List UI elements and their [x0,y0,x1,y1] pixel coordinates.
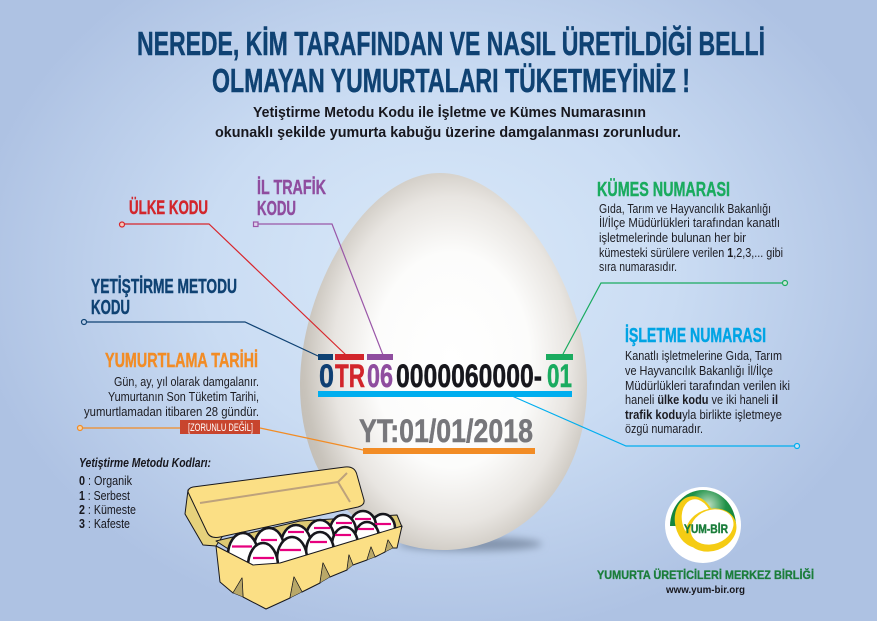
heading: yetiştirme metodu kodu: YETİŞTİRME METODU [91,275,237,298]
panel: kümes numarası: İl/İlçe Müdürlükleri tarafından kanatlı [599,215,780,230]
panel: işletme numarası: Kanatlı işletmelerine Gıda, Tarım [625,348,782,363]
panel: kümes numarası: kümesteki sürülere verilen 1,2,3,... gibi [599,245,783,260]
logo: yum-bir: YUM-BİR [684,521,728,536]
heading: ülke kodu: ÜLKE KODU [129,198,208,219]
title: OLMAYAN YUMURTALARI TÜKETMEYİNİZ ! [212,62,690,99]
egg date stamp: YT:01/01/2018 [359,413,533,449]
logo caption: YUMURTA ÜRETİCİLERİ MERKEZ BİRLİĞİ [597,567,814,582]
logo: yum-bir [665,487,743,563]
panel: kümes numarası: sıra numarasıdır. [599,259,677,274]
leader: ülke kodu [120,222,346,355]
egg [300,173,587,550]
subtitle [215,104,681,141]
leader: kümes numarası [563,280,788,354]
legend: yetiştirme metodu kodları: 1 : Serbest [79,488,130,503]
panel: yumurtlama tarihi: Yumurtanın Son Tüketim Tarihi, [108,389,259,404]
heading: yetiştirme metodu kodu: KODU [91,297,130,319]
egg stamp code: 0 [319,358,334,394]
panel: yumurtlama tarihi: yumurtlamadan itibaren 28 gündür. [84,404,259,419]
date underline [363,448,535,454]
egg stamp code: TR [335,358,365,394]
panel: kümes numarası: Gıda, Tarım ve Hayvancılık Bakanlığı [599,201,771,216]
legend: yetiştirme metodu kodları: 2 : Kümeste [79,502,136,517]
panel: işletme numarası: trafik koduyla birlikte işletmeye [625,407,782,422]
egg shadow [398,537,542,551]
heading: yetiştirme metodu kodu [91,275,237,319]
heading: il trafik kodu: KODU [257,198,296,220]
heading: il trafik kodu: İL TRAFİK [257,176,326,199]
website: www.yum-bir.org [665,585,745,596]
panel: işletme numarası: ve Hayvancılık Bakanlığı İl/İlçe [625,363,773,378]
leader: yetiştirme metodu kodu [82,320,318,356]
egg stamp code: 0000060000- [396,358,542,394]
badge: zorunlu değil: [ZORUNLU DEĞİL] [188,421,253,434]
legend: yetiştirme metodu kodları: 0 : Organik [79,473,132,488]
leader: işletme numarası [512,396,800,448]
panel: işletme numarası: haneli ülke kodu ve iki haneli il [625,392,778,407]
panel: işletme numarası: Müdürlükleri tarafından verilen iki [625,378,790,393]
legend: yetiştirme metodu kodları [79,455,211,531]
panel: yumurtlama tarihi: YUMURTLAMA TARİHİ [105,349,258,372]
panel: kümes numarası [597,178,783,274]
panel: yumurtlama tarihi: Gün, ay, yıl olarak damgalanır. [114,374,259,389]
heading: il trafik kodu [257,176,326,220]
egg stamp code: 06 [367,358,393,394]
panel: işletme numarası [625,324,790,436]
panel: işletme numarası: İŞLETME NUMARASI [625,324,766,347]
subtitle: Yetiştirme Metodu Kodu ile İşletme ve Kümes Numarasının [253,104,646,121]
leader: il trafik kodu [254,222,383,355]
subtitle: okunaklı şekilde yumurta kabuğu üzerine damgalanması zorunludur. [215,124,681,141]
title [137,25,765,99]
panel: işletme numarası: özgü numaradır. [625,421,703,436]
egg stamp code: 01 [547,358,572,394]
legend: yetiştirme metodu kodları: 3 : Kafeste [79,516,130,531]
panel: kümes numarası: KÜMES NUMARASI [597,178,730,201]
legend: yetiştirme metodu kodları: Yetiştirme Metodu Kodları: [79,455,211,470]
badge: zorunlu değil [180,420,260,434]
code bars [318,354,573,397]
egg stamp code [319,358,572,394]
leader: yumurtlama tarihi [78,426,363,450]
panel: kümes numarası: işletmelerinde bulunan her bir [599,230,747,245]
icon: egg carton [185,467,402,609]
panel: yumurtlama tarihi [84,349,259,419]
